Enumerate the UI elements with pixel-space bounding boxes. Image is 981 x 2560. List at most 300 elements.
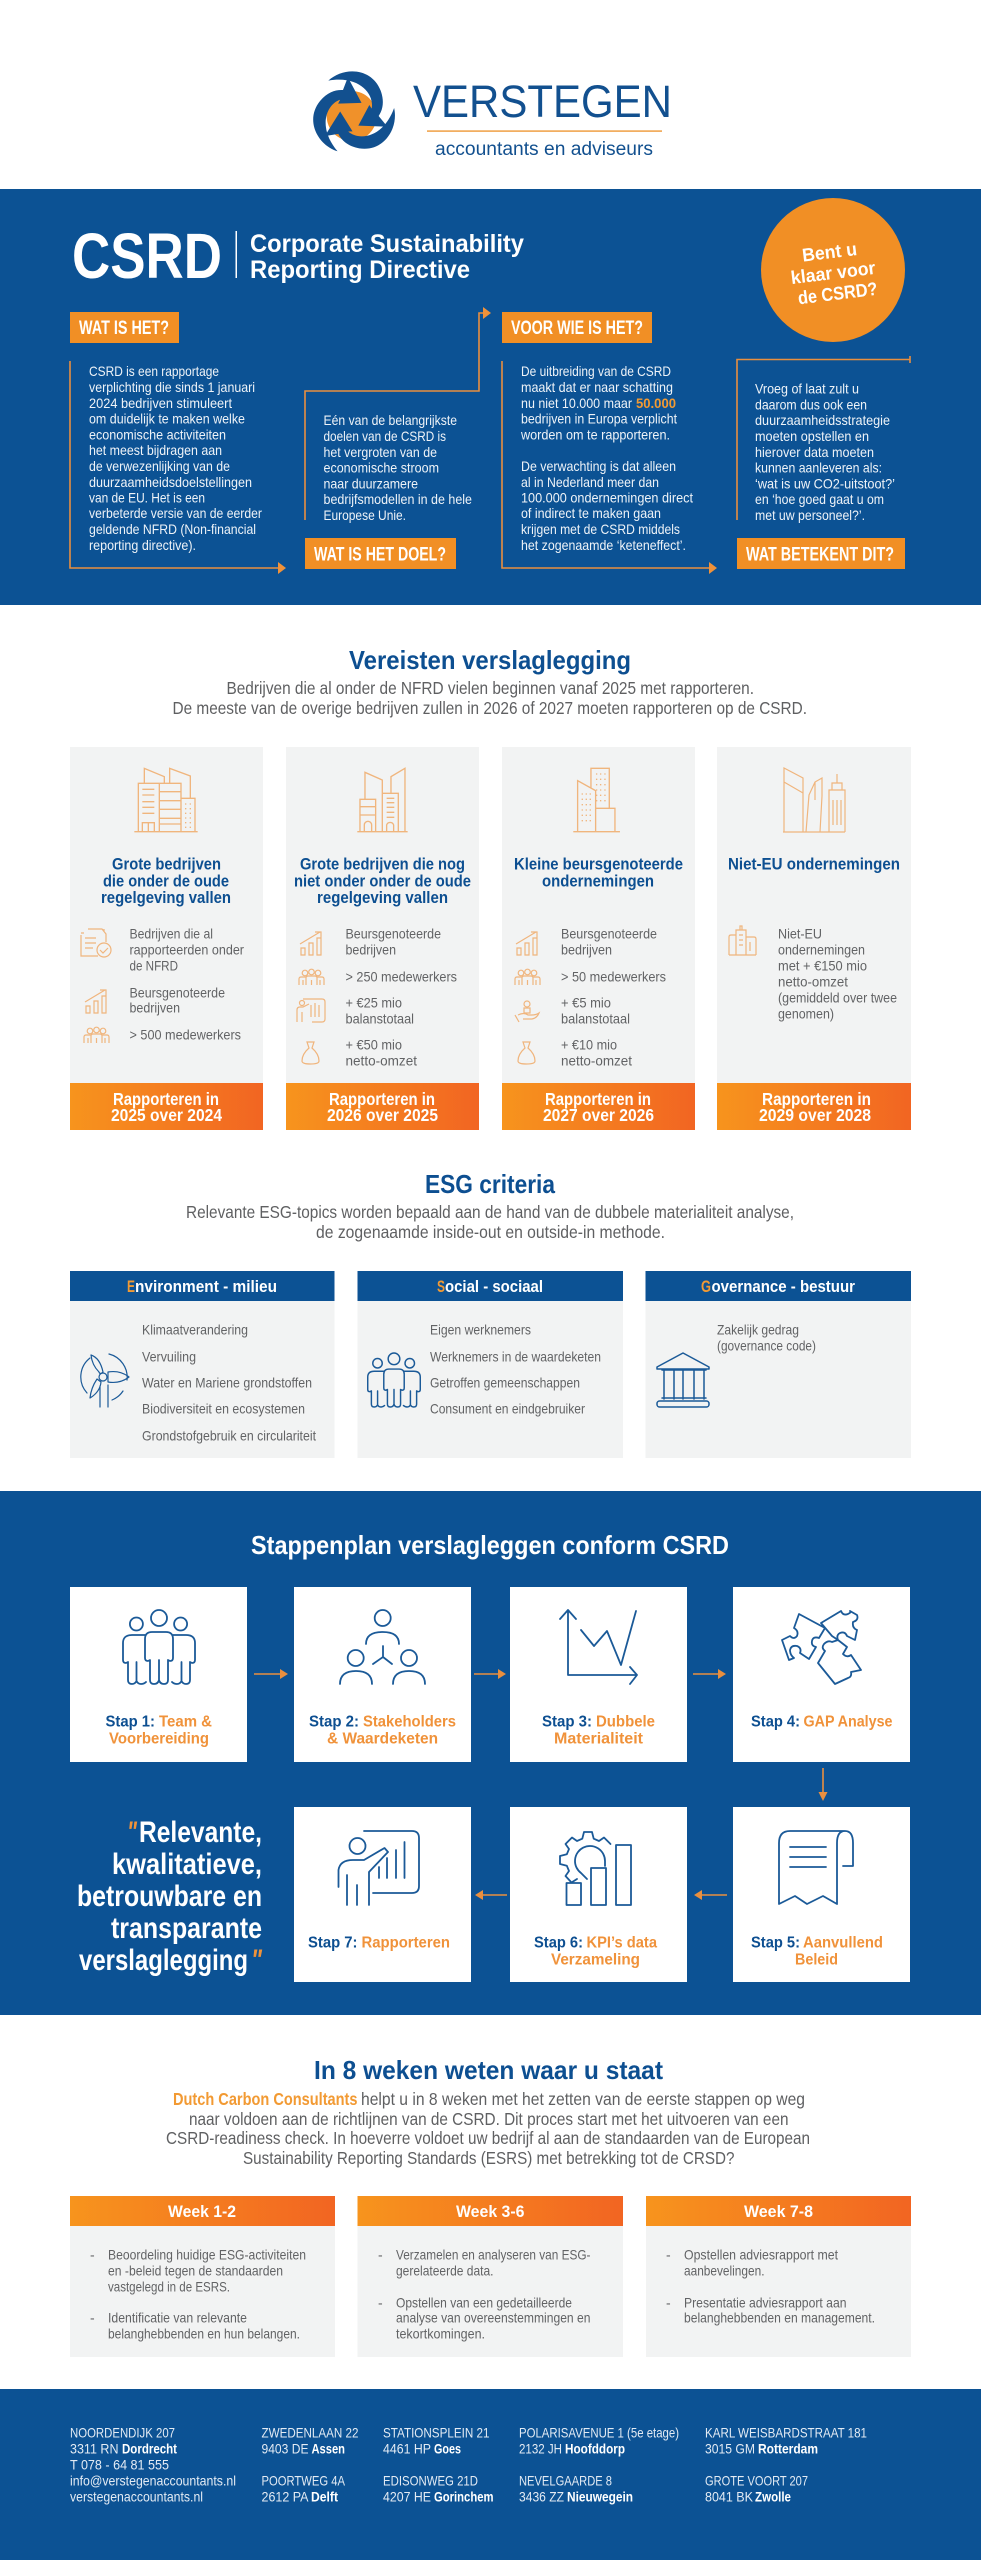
arrow: 3 to 4 <box>693 1669 726 1679</box>
list: Identificatie van relevante <box>108 2310 247 2326</box>
heading: Vereisten verslaglegging: Vereisten verslaglegging <box>349 645 631 675</box>
footer address: Dordrecht: verstegenaccountants.nl <box>70 2488 203 2504</box>
quote: Relevante, <box>139 1816 262 1849</box>
list: aanbevelingen. <box>684 2262 764 2278</box>
panel header: overnance - bestuur <box>712 1278 856 1296</box>
list: Opstellen adviesrapport met <box>684 2246 838 2262</box>
step 5 card <box>733 1807 910 1982</box>
icon: wind turbine <box>81 1354 129 1407</box>
subtitle: Corporate Sustainability Reporting Directive: Reporting Directive <box>250 256 470 284</box>
list: Verzamelen en analyseren van ESG- <box>396 2246 591 2262</box>
text: wat is het doel: het vergroten van de <box>324 444 437 460</box>
footer address: Assen and Delft: 9403 DE <box>262 2440 308 2456</box>
footer address: Assen and Delft: Delft <box>311 2488 338 2504</box>
card title: regelgeving vallen <box>317 889 448 907</box>
step label: Stap 2: <box>309 1714 359 1730</box>
step 3 card <box>510 1587 687 1762</box>
card title: ondernemingen <box>542 872 654 890</box>
list: Beoordeling huidige ESG-activiteiten <box>108 2246 306 2262</box>
list item text: de NFRD <box>130 958 178 974</box>
text: wat is het doel: doelen van de CSRD is <box>324 428 446 444</box>
card title: Grote bedrijven die nog <box>300 856 465 874</box>
footer address: Hoofddorp and Nieuwegein: 2132 JH <box>519 2440 562 2456</box>
footer address: Dordrecht: info@verstegenaccountants.nl <box>70 2472 236 2488</box>
list item text: Niet-EU <box>778 926 822 942</box>
callout: Bent u klaar voor de CSRD? <box>761 198 905 342</box>
icon: money bag <box>302 1042 319 1064</box>
card title: niet onder onder de oude <box>294 872 471 890</box>
footer address: Rotterdam and Zwolle: Rotterdam <box>758 2440 818 2456</box>
list: Vervuiling <box>142 1348 196 1364</box>
icon: receipt <box>779 1831 853 1904</box>
footer address: Hoofddorp and Nieuwegein: Nieuwegein <box>567 2488 633 2504</box>
list item text: > 50 medewerkers <box>561 968 666 984</box>
footer address: Rotterdam and Zwolle: KARL WEISBARDSTRAAT 181 <box>705 2424 867 2440</box>
panel: card 4 niet-EU <box>717 747 911 1130</box>
panel: CSRD intro band <box>0 189 981 605</box>
list item text: Beursgenoteerde <box>346 926 441 942</box>
callout: Bent u klaar voor de CSRD?: klaar voor <box>790 257 877 288</box>
step label: KPI’s data <box>586 1934 657 1952</box>
step label <box>308 1934 450 1952</box>
list item text <box>561 994 630 1026</box>
text: 8 weken intro: Dutch Carbon Consultants <box>173 2089 358 2109</box>
text: 8 weken intro: Sustainability Reporting Standards (ESRS) met betrekking tot de CRSD? <box>243 2148 735 2168</box>
text: voor wie is het: al in Nederland meer dan <box>521 474 659 490</box>
report bar: 2026 over 2025 <box>327 1105 438 1125</box>
label: WAT IS HET?: WAT IS HET? <box>79 318 169 339</box>
card title: regelgeving vallen <box>101 889 231 907</box>
text: voor wie is het: krijgen met de CSRD middels <box>521 521 680 537</box>
icon: buildings <box>134 768 198 832</box>
label: WAT BETEKENT DIT?: WAT BETEKENT DIT? <box>746 544 894 566</box>
text: Vereisten intro <box>172 678 807 718</box>
icon: team <box>123 1610 195 1684</box>
icon: buildings <box>357 768 408 832</box>
text: voor wie is het: 100.000 ondernemingen direct <box>521 490 693 506</box>
arrow: connector 2 <box>305 307 491 520</box>
footer address: Assen and Delft <box>262 2424 359 2504</box>
panel: Week 3-6 <box>358 2196 623 2357</box>
list item text: bedrijven <box>346 942 396 958</box>
panel: Governance <box>646 1271 911 1458</box>
card title <box>514 856 683 890</box>
list item text <box>346 1036 417 1068</box>
list: Eigen werknemers <box>430 1322 531 1338</box>
report bar: Rapporteren in <box>545 1089 651 1109</box>
icon: people <box>299 969 324 985</box>
footer address: Dordrecht: NOORDENDIJK 207 <box>70 2424 175 2440</box>
list item text: > 500 medewerkers <box>130 1026 241 1042</box>
step label: Dubbele <box>596 1714 655 1730</box>
icon: stakeholders <box>340 1610 425 1684</box>
list item text: balanstotaal <box>346 1010 414 1026</box>
step label: Stap 5: <box>751 1934 800 1952</box>
list item text: + €10 mio <box>561 1036 617 1052</box>
step label: Stap 3: <box>542 1714 592 1730</box>
list item text <box>346 926 441 958</box>
label: WAT IS HET DOEL? <box>305 538 456 569</box>
step label: Aanvullend <box>803 1934 883 1952</box>
icon: hand with coins <box>515 1001 539 1022</box>
footer address: Rotterdam and Zwolle: Zwolle <box>755 2488 791 2504</box>
list item text: Bedrijven die al <box>130 926 213 942</box>
list: belanghebbenden en hun belangen. <box>108 2326 300 2342</box>
heading: ESG criteria: ESG criteria <box>425 1169 555 1199</box>
quote: betrouwbare en <box>77 1880 262 1913</box>
icon: office building <box>729 926 756 955</box>
list: Biodiversiteit en ecosystemen <box>142 1400 305 1416</box>
label: WAT IS HET? <box>70 312 179 343</box>
icon: money bag <box>518 1042 535 1064</box>
text: voor wie is het: De verwachting is dat alleen <box>521 458 676 474</box>
icon: bank building <box>657 1353 709 1407</box>
panel header: nvironment - milieu <box>135 1278 277 1296</box>
footer address: Hoofddorp and Nieuwegein: NEVELGAARDE 8 <box>519 2472 612 2488</box>
text: ESG intro <box>186 1202 794 1242</box>
icon: presentation <box>297 999 325 1022</box>
text: wat is het: het meest bijdragen aan <box>89 442 222 458</box>
card title <box>294 856 471 907</box>
list: tekortkomingen. <box>396 2326 485 2342</box>
step label: Rapporteren <box>362 1934 450 1952</box>
step 1 card <box>70 1587 247 1762</box>
text: wat is het: economische activiteiten <box>89 426 226 442</box>
list: Grondstofgebruik en circulariteit <box>142 1428 316 1444</box>
arrow: 5 to 6 <box>694 1890 727 1900</box>
footer address: Assen and Delft: Assen <box>312 2440 345 2456</box>
list item text: balanstotaal <box>561 1010 630 1026</box>
list item text: rapporteerden onder <box>130 942 244 958</box>
footer address: Goes and Gorinchem <box>383 2424 494 2504</box>
list: (governance code) <box>717 1338 816 1354</box>
step label: Stap 6: <box>534 1934 583 1952</box>
callout: Bent u klaar voor de CSRD?: de CSRD? <box>797 278 879 308</box>
list: Opstellen van een gedetailleerde <box>396 2294 572 2310</box>
arrow: connector 4 <box>737 356 910 520</box>
footer address: Hoofddorp and Nieuwegein: Hoofddorp <box>565 2440 625 2456</box>
footer address: Hoofddorp and Nieuwegein: 3436 ZZ <box>519 2488 564 2504</box>
footer address: Hoofddorp and Nieuwegein <box>519 2424 679 2504</box>
list item text <box>346 994 414 1026</box>
list item text: + €5 mio <box>561 994 611 1010</box>
text: voor wie is het <box>520 363 693 553</box>
step label: Verzameling <box>551 1952 640 1968</box>
text: 8 weken intro: CSRD-readiness check. In hoeverre voldoet uw bedrijf al aan de standaarden van de European <box>166 2128 810 2148</box>
card title: Niet-EU ondernemingen <box>728 856 900 874</box>
panel: Social <box>358 1271 623 1458</box>
heading: In 8 weken weten waar u staat: In 8 weken weten waar u staat <box>314 2055 663 2085</box>
panel: card 2 grote bedrijven nog niet <box>286 747 479 1130</box>
card title <box>101 856 231 907</box>
list: Consument en eindgebruiker <box>430 1400 585 1416</box>
icon: people <box>515 969 540 985</box>
arrow: connector 3 <box>502 361 717 574</box>
list item text <box>561 926 657 958</box>
list item text: + €25 mio <box>346 994 402 1010</box>
text: voor wie is het: 50.000 <box>636 395 676 411</box>
icon: growth chart <box>300 932 321 955</box>
step 7 card <box>294 1807 471 1982</box>
arrow: 1 to 2 <box>254 1669 288 1679</box>
text: wat betekent dit: duurzaamheidsstrategie <box>755 412 890 428</box>
text: voor wie is het: of indirect te maken gaan <box>521 505 661 521</box>
card title: die onder de oude <box>103 872 229 890</box>
panel header: Week 7-8 <box>744 2203 813 2221</box>
title: CSRD: CSRD <box>72 220 222 292</box>
step label <box>751 1934 883 1968</box>
text: wat is het doel <box>324 412 472 523</box>
text: voor wie is het: worden om te rapporteren. <box>520 426 670 442</box>
icon: document check <box>81 929 111 957</box>
text: wat is het doel: economische stroom <box>324 460 439 476</box>
footer address: Goes and Gorinchem: 4461 HP <box>383 2440 431 2456</box>
list <box>717 1322 816 1354</box>
list: - <box>666 2246 671 2262</box>
panel: Week 1-2 <box>70 2196 335 2357</box>
step label: Stap 7: <box>308 1934 358 1952</box>
list: analyse van overeenstemmingen en <box>396 2310 590 2326</box>
list: - <box>378 2294 383 2310</box>
step label: & Waardeketen <box>327 1730 438 1748</box>
step label: GAP Analyse <box>804 1714 893 1730</box>
list item text: netto-omzet <box>346 1052 417 1068</box>
list item text: > 250 medewerkers <box>346 968 457 984</box>
report bar: 2029 over 2028 <box>759 1105 871 1125</box>
list: Water en Mariene grondstoffen <box>142 1374 312 1390</box>
list item text <box>130 926 244 974</box>
text: wat is het: om duidelijk te maken welke <box>89 410 245 426</box>
footer address: Goes and Gorinchem: EDISONWEG 21D <box>383 2472 478 2488</box>
text: voor wie is het: De uitbreiding van de CSRD <box>521 363 671 379</box>
list: en -beleid tegen de standaarden <box>108 2262 283 2278</box>
report bar <box>502 1083 695 1130</box>
footer address: Dordrecht: 3311 RN <box>70 2440 118 2456</box>
quote: verslaglegging <box>79 1944 248 1977</box>
logo wordmark: VERSTEGEN <box>413 76 672 127</box>
text: voor wie is het: bedrijven in Europa verplicht <box>521 410 677 426</box>
logo tagline: accountants en adviseurs <box>435 139 653 160</box>
footer address: Goes and Gorinchem: STATIONSPLEIN 21 <box>383 2424 490 2440</box>
text: wat is het: verplichting die sinds 1 januari <box>89 379 255 395</box>
text: wat betekent dit: Vroeg of laat zult u <box>755 380 859 396</box>
text: 8 weken intro <box>166 2089 810 2168</box>
panel header: Week 1-2 <box>168 2203 236 2221</box>
list: Zakelijk gedrag <box>717 1322 799 1338</box>
icon: growth chart <box>85 990 106 1013</box>
step label: Voorbereiding <box>109 1730 209 1748</box>
icon: buildings <box>573 768 620 832</box>
quote: kwalitatieve, <box>112 1848 262 1881</box>
text: voor wie is het: nu niet 10.000 maar <box>521 395 632 411</box>
label: VOOR WIE IS HET? <box>502 312 652 343</box>
list item text: (gemiddeld over twee <box>778 990 897 1006</box>
subtitle: Corporate Sustainability Reporting Directive: Corporate Sustainability <box>250 230 524 258</box>
step 4 card <box>733 1587 910 1762</box>
subtitle: Corporate Sustainability Reporting Directive <box>250 230 524 284</box>
list item text <box>561 1036 632 1068</box>
label: WAT IS HET DOEL?: WAT IS HET DOEL? <box>314 544 446 566</box>
list: Presentatie adviesrapport aan <box>684 2294 846 2310</box>
report bar: 2027 over 2026 <box>543 1105 654 1125</box>
text: wat is het doel: naar duurzamere <box>324 476 418 492</box>
footer address: Goes and Gorinchem: 4207 HE <box>383 2488 431 2504</box>
text: wat betekent dit: met uw personeel?’. <box>755 507 865 523</box>
report bar: 2025 over 2024 <box>111 1105 222 1125</box>
list: - <box>90 2246 95 2262</box>
text: wat is het <box>89 363 262 553</box>
quote: transparante <box>111 1912 262 1945</box>
text: wat is het: CSRD is een rapportage <box>89 363 219 379</box>
list <box>378 2246 591 2342</box>
step 6 card <box>510 1807 687 1982</box>
footer address: Rotterdam and Zwolle <box>705 2424 867 2504</box>
text: wat is het: reporting directive). <box>89 537 196 553</box>
text: wat is het: van de EU. Het is een <box>89 490 205 506</box>
step label: Stap 4: <box>751 1714 800 1730</box>
step label <box>106 1714 212 1748</box>
quote: " <box>251 1944 263 1977</box>
list item text: bedrijven <box>130 1000 180 1016</box>
step label: Stap 1: <box>106 1714 155 1730</box>
icon: chart <box>560 1610 637 1684</box>
icon: people <box>84 1027 109 1043</box>
panel header: E <box>127 1278 135 1296</box>
report bar: Rapporteren in <box>113 1089 219 1109</box>
step label <box>751 1714 893 1730</box>
footer address: Rotterdam and Zwolle: GROTE VOORT 207 <box>705 2472 808 2488</box>
list item text: ondernemingen <box>778 942 865 958</box>
icon: gear and bars <box>560 1832 631 1905</box>
icon: puzzle <box>782 1611 861 1684</box>
text: voor wie is het: het zogenaamde ‘keteneffect’. <box>521 537 686 553</box>
label: VOOR WIE IS HET?: VOOR WIE IS HET? <box>511 318 643 339</box>
text: wat betekent dit: hierover data moeten <box>755 444 874 460</box>
icon: buildings <box>783 768 845 832</box>
text: wat is het: verbeterde versie van de eerder <box>89 505 262 521</box>
list: Klimaatverandering <box>142 1322 248 1338</box>
heading: Stappenplan: Stappenplan verslagleggen conform CSRD <box>251 1530 729 1560</box>
list: belanghebbenden en management. <box>684 2310 875 2326</box>
icon: presenter <box>338 1831 419 1905</box>
list <box>430 1322 601 1416</box>
footer address: Goes and Gorinchem: Goes <box>434 2440 461 2456</box>
footer address: Hoofddorp and Nieuwegein: POLARISAVENUE 1 (5e etage) <box>519 2424 679 2440</box>
list <box>142 1322 316 1444</box>
text: wat is het doel: bedrijfsmodellen in de hele <box>324 491 472 507</box>
text: wat is het: geldende NFRD (Non-financial <box>89 521 256 537</box>
panel: Stappenplan band <box>0 1491 981 2015</box>
footer <box>0 2389 981 2560</box>
text: ESG intro: de zogenaamde inside-out en outside-in methode. <box>316 1222 665 1242</box>
step label: Materialiteit <box>554 1730 644 1748</box>
list item text: bedrijven <box>561 942 612 958</box>
list item text: Beursgenoteerde <box>130 984 225 1000</box>
panel: Week 7-8 <box>646 2196 911 2357</box>
step label: Team & <box>159 1714 212 1730</box>
arrow: connector 1 <box>70 361 286 574</box>
list item text: + €50 mio <box>346 1036 402 1052</box>
label: WAT BETEKENT DIT? <box>737 538 905 569</box>
list: Werknemers in de waardeketen <box>430 1348 601 1364</box>
list: - <box>378 2246 383 2262</box>
arrow: 4 to 5 <box>818 1768 828 1801</box>
list <box>666 2246 875 2326</box>
list item text <box>778 926 897 1022</box>
text: wat betekent dit: en ‘hoe goed gaat u om <box>755 491 884 507</box>
text: wat is het: de verwezenlijking van de <box>89 458 230 474</box>
panel header: Week 3-6 <box>456 2203 524 2221</box>
arrow: 2 to 3 <box>474 1669 506 1679</box>
step label <box>534 1934 657 1968</box>
text: wat betekent dit: daarom dus ook een <box>755 396 867 412</box>
panel: card 1 grote bedrijven <box>70 747 263 1130</box>
list: - <box>666 2294 671 2310</box>
text: wat betekent dit: ‘wat is uw CO2-uitstoot?’ <box>755 476 895 492</box>
list <box>90 2246 306 2342</box>
list: Getroffen gemeenschappen <box>430 1374 580 1390</box>
step label: Beleid <box>795 1952 838 1968</box>
icon: growth chart <box>516 932 537 955</box>
icon: swirl logo mark <box>300 71 402 164</box>
text: wat betekent dit <box>755 380 895 523</box>
footer address: Dordrecht: T 078 - 64 81 555 <box>70 2456 169 2472</box>
panel: card 3 kleine beursgenoteerde <box>502 747 695 1130</box>
text: wat is het: duurzaamheidsdoelstellingen <box>89 474 252 490</box>
panel header: ocial - sociaal <box>445 1278 543 1296</box>
text: wat is het doel: Europese Unie. <box>324 507 406 523</box>
logo: Verstegen accountants en adviseurs <box>300 71 672 164</box>
footer address: Dordrecht <box>70 2424 236 2504</box>
step 2 card <box>294 1587 471 1762</box>
footer address: Rotterdam and Zwolle: 3015 GM <box>705 2440 755 2456</box>
text: 8 weken intro: helpt u in 8 weken met het zetten van de eerste stappen op weg <box>361 2089 805 2109</box>
list item text: netto-omzet <box>561 1052 632 1068</box>
footer address: Assen and Delft: ZWEDENLAAN 22 <box>262 2424 359 2440</box>
arrow: 6 to 7 <box>475 1890 507 1900</box>
list: - <box>90 2310 95 2326</box>
panel header: S <box>437 1278 445 1296</box>
text: Vereisten intro: De meeste van de overige bedrijven zullen in 2026 of 2027 moeten rapporteren op de CSRD. <box>172 698 807 718</box>
quote <box>77 1816 263 1977</box>
text: ESG intro: Relevante ESG-topics worden bepaald aan de hand van de dubbele materialiteit analyse, <box>186 1202 794 1222</box>
text: wat betekent dit: kunnen aanleveren als: <box>755 460 882 476</box>
text: Vereisten intro: Bedrijven die al onder de NFRD vielen beginnen vanaf 2025 met rapporteren. <box>226 678 754 698</box>
footer address: Goes and Gorinchem: Gorinchem <box>434 2488 494 2504</box>
report bar <box>286 1083 479 1130</box>
card title: Grote bedrijven <box>112 856 221 874</box>
footer address: Assen and Delft: POORTWEG 4A <box>262 2472 346 2488</box>
panel header: G <box>701 1278 711 1296</box>
callout: Bent u klaar voor de CSRD?: Bent u <box>801 238 858 266</box>
quote: " <box>127 1816 138 1849</box>
text: wat betekent dit: moeten opstellen en <box>755 428 869 444</box>
step label <box>542 1714 655 1748</box>
text: voor wie is het: maakt dat er naar schatting <box>521 379 673 395</box>
step label <box>309 1714 456 1748</box>
footer address: Assen and Delft: 2612 PA <box>262 2488 309 2504</box>
footer address: Rotterdam and Zwolle: 8041 BK <box>705 2488 754 2504</box>
footer address: Dordrecht: Dordrecht <box>122 2440 177 2456</box>
list item text: Beursgenoteerde <box>561 926 657 942</box>
list: vastgelegd in de ESRS. <box>108 2278 230 2294</box>
list item text: met + €150 mio <box>778 958 867 974</box>
list item text <box>130 984 225 1016</box>
panel: Environment <box>70 1271 334 1458</box>
step label: Stakeholders <box>363 1714 456 1730</box>
list item text: netto-omzet <box>778 974 848 990</box>
icon: people <box>368 1353 420 1407</box>
